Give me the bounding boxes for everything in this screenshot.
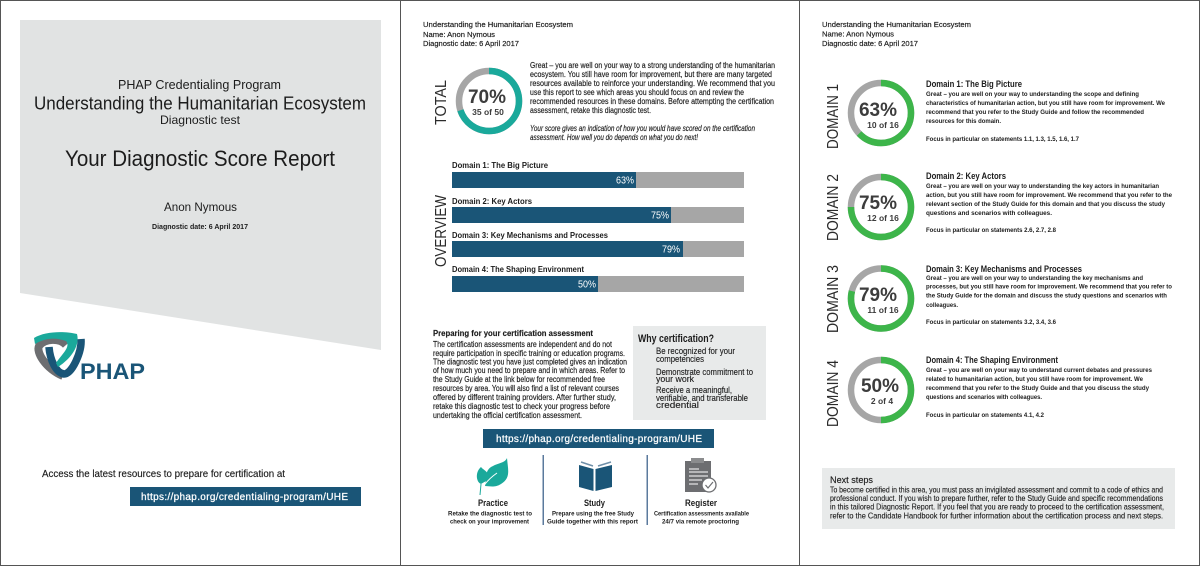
page header: Diagnostic date: 6 April 2017: [423, 39, 519, 48]
cover title block: PHAP Credentialing Program: [118, 77, 281, 92]
icon: leaves: [477, 458, 508, 495]
bar: domain 4: [452, 265, 744, 292]
page 2: overview: [400, 0, 800, 566]
why certification panel: [633, 326, 766, 420]
cover title block: Understanding the Humanitarian Ecosystem: [34, 94, 366, 114]
candidate name and date: Diagnostic date: 6 April 2017: [152, 222, 248, 231]
domain 2 section: [825, 171, 1172, 241]
bar: domain 2: [452, 197, 744, 223]
PHAP logo: PHAP: [80, 359, 145, 384]
icon: book: [579, 462, 612, 491]
preparing text block: undertaking the official certification assessment.: [433, 411, 582, 420]
total score donut: 70%: [468, 87, 506, 108]
bar: domain 3: 79%: [662, 244, 680, 256]
domain 3 section: Great – you are well on your way to understanding the key mechanisms and: [926, 275, 1143, 282]
why certification panel: Demonstrate commitment to: [656, 367, 753, 377]
practice step: Practice: [478, 498, 508, 509]
page header: Understanding the Humanitarian Ecosystem: [423, 20, 573, 29]
page 1: cover: [0, 0, 400, 566]
total score donut: 35 of 50: [472, 107, 504, 117]
preparing text block: [433, 329, 627, 420]
cover panel: [20, 20, 381, 350]
next steps panel: in this tailored Diagnostic Report. If you feel that you are ready to proceed to the certification assessment,: [830, 502, 1164, 512]
page header: [822, 20, 971, 48]
domain 1 section: 10 of 16: [867, 120, 899, 130]
total feedback text: assessment, retake this diagnostic test.: [530, 106, 651, 115]
practice step: Retake the diagnostic test to: [448, 510, 532, 518]
total score donut: [459, 71, 519, 131]
domain 1 section: recommend that you refer to the Study Guide and follow the recommended: [926, 109, 1144, 116]
resources prompt: Access the latest resources to prepare for certification at: [42, 468, 285, 480]
domain 4 section: recommend that you refer to the Study Guide and that you discuss the study: [926, 385, 1149, 392]
bar: domain 1: [452, 161, 744, 188]
domain 1 section: characteristics of humanitarian action, but you still have room for improvement. We: [926, 100, 1165, 107]
preparing text block: The certification assessments are independent and do not: [433, 340, 613, 349]
domain 4 section: questions and scenarios with colleagues.: [926, 394, 1042, 401]
domain 3 section: colleagues.: [926, 302, 958, 309]
why certification panel: your work: [656, 374, 695, 384]
study step: Guide together with this report: [547, 518, 639, 526]
cover title block: Your Diagnostic Score Report: [65, 146, 335, 171]
domain 1 section: DOMAIN 1: [825, 84, 842, 149]
total feedback text: recommended resources in these domains. Before attempting the certification: [530, 97, 774, 106]
preparing text block: the Study Guide at the link below for recommended free: [433, 375, 605, 384]
domain 3 section: 79%: [859, 285, 897, 306]
candidate name and date: Anon Nymous: [164, 202, 237, 214]
preparing text block: retake this diagnostic test to check your progress before: [433, 402, 610, 411]
why certification panel: credential: [656, 400, 699, 410]
why certification panel: Why certification?: [638, 333, 714, 345]
total feedback text: use this report to see which areas you should focus on and review the: [530, 88, 744, 97]
domain 4 section: Great – you are well on your way to understand current debates and pressures: [926, 367, 1152, 374]
practice step: check on your improvement: [450, 518, 530, 526]
total label: TOTAL: [433, 80, 450, 125]
URL banner: [483, 429, 714, 448]
register step: [654, 498, 749, 526]
domain 2 section: questions and scenarios with colleagues.: [926, 210, 1052, 217]
page header: Name: Anon Nymous: [423, 30, 495, 39]
register step: Register: [685, 498, 717, 509]
domain 2 section: Great – you are well on your way to understanding the key actors in humanitarian: [926, 183, 1159, 190]
why certification panel: verifiable, and transferable: [656, 393, 748, 403]
total feedback text: Great – you are well on your way to a strong understanding of the humanitarian: [530, 61, 775, 70]
page header: [423, 20, 573, 48]
total feedback text: Your score gives an indication of how you would have scored on the certification: [530, 124, 755, 133]
next steps panel: professional conduct. If you wish to prepare further, refer to the Study Guide and specific recommendations: [830, 494, 1163, 503]
domain 4 section: 50%: [861, 376, 899, 397]
preparing text block: Preparing for your certification assessment: [433, 329, 593, 338]
page header: Name: Anon Nymous: [822, 30, 894, 38]
domain 4 section: related to humanitarian action, but you still have room for improvement. We: [926, 376, 1143, 383]
domain 2 section: Domain 2: Key Actors: [926, 171, 1006, 181]
bar: domain 1: Domain 1: The Big Picture: [452, 161, 549, 170]
bar: domain 2: Domain 2: Key Actors: [452, 197, 533, 206]
cover title block: Diagnostic test: [160, 113, 241, 127]
domain 1 section: Focus in particular on statements 1.1, 1.3, 1.5, 1.6, 1.7: [926, 136, 1079, 143]
total feedback text: [530, 61, 775, 142]
why certification panel: Receive a meaningful,: [656, 385, 732, 395]
preparing text block: offered by different training providers. After further study,: [433, 393, 616, 402]
study step: [547, 498, 639, 526]
study step: Study: [584, 498, 606, 509]
domain 3 section: [825, 264, 1172, 333]
domain 1 section: Domain 1: The Big Picture: [926, 79, 1022, 89]
bar: domain 2: 75%: [651, 210, 669, 222]
page header: Understanding the Humanitarian Ecosystem: [822, 20, 971, 29]
preparing text block: require participation in specific training or education programs.: [433, 349, 625, 358]
page 3: domain detail: [800, 0, 1200, 566]
URL banner: https://phap.org/credentialing-program/UHE: [141, 492, 348, 503]
practice step: [448, 498, 532, 526]
domain 3 section: 11 of 16: [867, 305, 899, 315]
preparing text block: The diagnostic test you have just completed gives an indication: [433, 358, 627, 366]
domain 3 section: processes, but you still have room for improvement. We recommend that you refer to: [926, 284, 1172, 290]
icon: clipboard: [685, 458, 716, 492]
domain 3 section: DOMAIN 3: [825, 265, 842, 333]
next steps panel: [822, 468, 1175, 529]
domain 3 section: Domain 3: Key Mechanisms and Processes: [926, 264, 1082, 274]
domain 2 section: relevant section of the Study Guide for this domain and that you discuss the study: [926, 201, 1165, 208]
overview label: OVERVIEW: [433, 195, 450, 267]
domain 2 section: Focus in particular on statements 2.6, 2.7, 2.8: [926, 227, 1056, 234]
next steps panel: Next steps: [830, 475, 873, 485]
domain 2 section: 12 of 16: [867, 213, 899, 223]
domain 4 section: 2 of 4: [871, 396, 893, 406]
bar: domain 4: 50%: [578, 278, 596, 290]
domain 4 section: Focus in particular on statements 4.1, 4.2: [926, 412, 1044, 419]
preparing text block: resources by area. You will also find a list of relevant courses: [433, 384, 619, 393]
page header: Diagnostic date: 6 April 2017: [822, 39, 918, 48]
why certification panel: competencies: [656, 354, 705, 364]
register step: 24/7 via remote proctoring: [662, 518, 739, 526]
domain 1 section: [825, 79, 1165, 149]
next steps panel: refer to the Candidate Handbook for further information about the certification process and next steps.: [830, 512, 1163, 520]
total feedback text: assessment. How well you do depends on what you do next!: [530, 133, 699, 142]
register step: Certification assessments available: [654, 510, 749, 518]
bar: domain 3: [452, 231, 744, 257]
bar: domain 1: 63%: [616, 174, 634, 186]
why certification panel: Be recognized for your: [656, 346, 735, 356]
total feedback text: ecosystem. You still have room for improvement, but there are many targeted: [530, 70, 772, 79]
study step: Prepare using the free Study: [552, 510, 634, 518]
domain 2 section: DOMAIN 2: [825, 174, 842, 241]
total feedback text: resources available to reinforce your understanding. We recommend that you: [530, 79, 775, 88]
preparing text block: of how much you need to prepare and in which areas. Refer to: [433, 366, 625, 375]
domain 1 section: Great – you are well on your way to understanding the scope and defining: [926, 91, 1139, 98]
domain 3 section: the Study Guide for the domain and discuss the study questions and scenarios with: [926, 292, 1167, 300]
domain 1 section: 63%: [859, 100, 897, 121]
URL banner: [130, 487, 361, 506]
domain 2 section: 75%: [859, 193, 897, 214]
cover title block: [34, 77, 366, 171]
domain 2 section: action, but you still have room for improvement. We recommend that you refer to the: [926, 192, 1172, 199]
domain 1 section: resources for this domain.: [926, 118, 1001, 125]
domain 3 section: Focus in particular on statements 3.2, 3.4, 3.6: [926, 319, 1056, 326]
domain 4 section: DOMAIN 4: [825, 360, 842, 427]
candidate name and date: [152, 202, 248, 231]
bar: domain 4: Domain 4: The Shaping Environment: [452, 265, 584, 274]
URL banner: https://phap.org/credentialing-program/UHE: [496, 434, 702, 445]
domain 4 section: Domain 4: The Shaping Environment: [926, 355, 1058, 365]
PHAP logo: [34, 332, 145, 384]
domain 4 section: [825, 355, 1152, 427]
bar: domain 3: Domain 3: Key Mechanisms and Processes: [452, 231, 609, 240]
